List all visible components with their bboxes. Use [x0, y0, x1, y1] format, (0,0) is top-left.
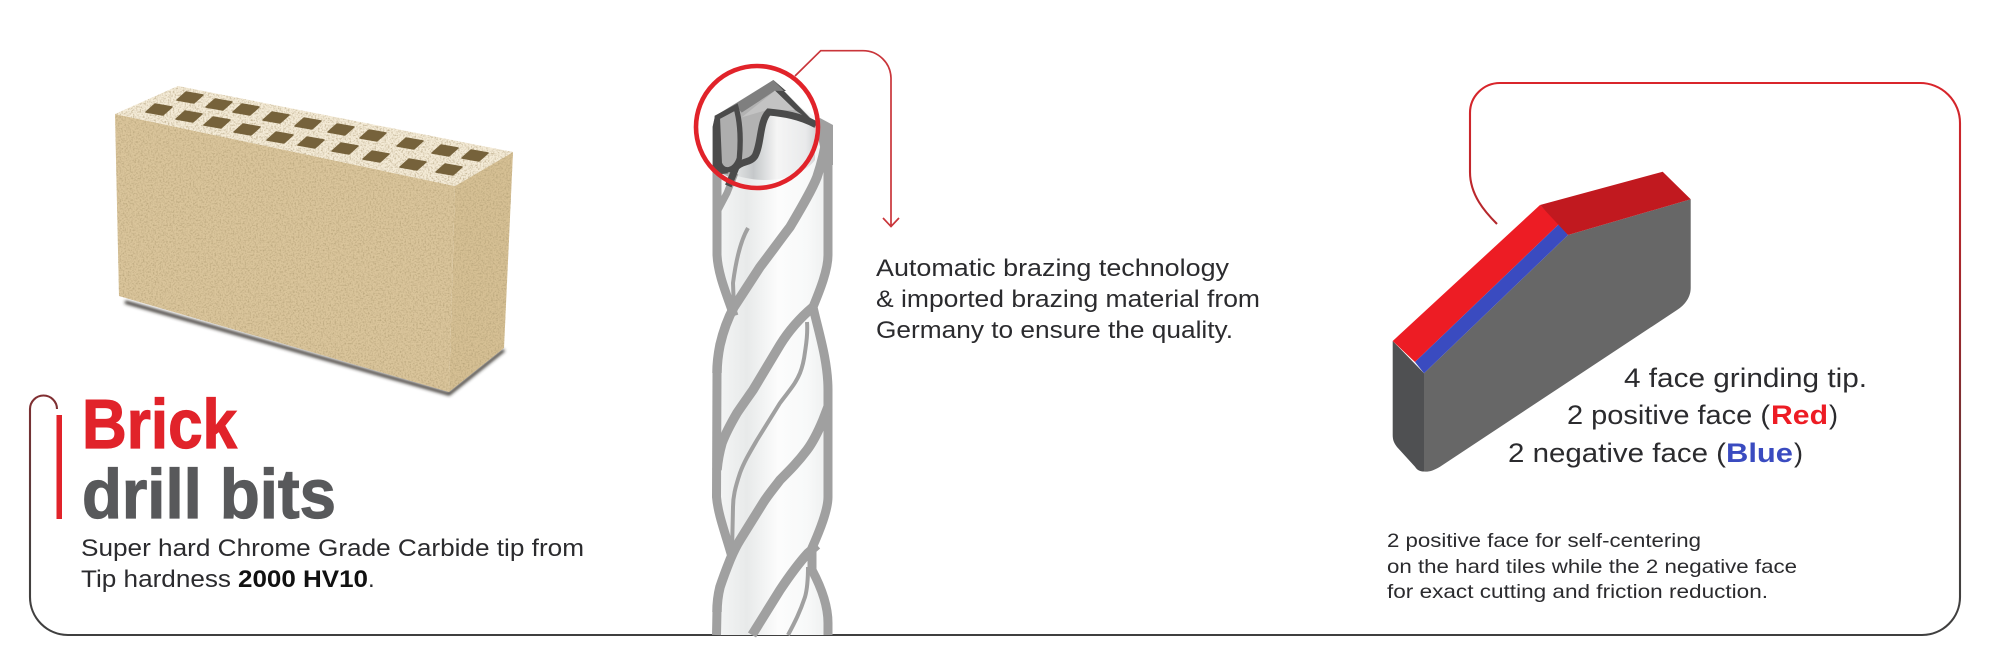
- title: [82, 385, 336, 533]
- red positive face: [1393, 205, 1559, 362]
- text: grinding faces legend: [1508, 363, 1867, 468]
- illustration: drill bit: [713, 80, 833, 635]
- text: positive and negative face explanation: for exact cutting and friction reduction.: [1387, 581, 1768, 603]
- text: carbide tip description: Tip hardness: [81, 566, 231, 593]
- text: grinding faces legend: ): [1794, 438, 1803, 468]
- text: grinding faces legend: 2 negative face (: [1508, 438, 1726, 468]
- text: positive and negative face explanation: on the hard tiles while the 2 negative face: [1387, 556, 1797, 578]
- text: brazing technology: & imported brazing material from: [876, 286, 1260, 313]
- carbide tip: [713, 80, 817, 186]
- main grey face: [1424, 199, 1691, 472]
- upper flute near tip: [717, 173, 735, 212]
- drill outer edges: [716, 125, 828, 635]
- text: brazing technology: Automatic brazing technology: [876, 255, 1229, 282]
- flute bands: [717, 135, 828, 635]
- accent: red vertical bar: [56, 415, 62, 519]
- text: carbide tip description: Super hard Chrome Grade Carbide tip from: [81, 535, 584, 562]
- text: positive and negative face explanation: [1387, 530, 1797, 603]
- title: drill bits: [82, 455, 336, 533]
- text: grinding faces legend: Red: [1771, 400, 1828, 430]
- text: carbide tip description: [81, 535, 584, 593]
- text: grinding faces legend: 4 face grinding tip.: [1624, 363, 1867, 393]
- title: Brick: [82, 385, 237, 463]
- arrow: lead line from circle to text: [795, 51, 899, 227]
- text: carbide tip description: .: [368, 566, 375, 593]
- text: brazing technology: [876, 255, 1260, 344]
- text: grinding faces legend: ): [1829, 400, 1838, 430]
- callout: red circle around tip: [696, 66, 818, 188]
- text: grinding faces legend: 2 positive face (: [1567, 400, 1770, 430]
- text: carbide tip description: 2000 HV10: [238, 566, 368, 593]
- thin flute lines: [732, 228, 808, 635]
- text: brazing technology: Germany to ensure the quality.: [876, 317, 1233, 344]
- shoulder edge: [815, 118, 833, 165]
- blue negative face: [1415, 224, 1568, 373]
- text: grinding faces legend: Blue: [1726, 438, 1793, 468]
- left side face: [1393, 341, 1424, 472]
- drill body fill: [716, 100, 828, 635]
- dark red top face: [1540, 172, 1691, 235]
- panel frame: rounded outline with hook and callout lead: [30, 83, 1960, 635]
- illustration: carbide grinding tip: [1393, 172, 1691, 472]
- drill head shading: [722, 110, 815, 180]
- image: hollow brick: [115, 86, 513, 394]
- text: positive and negative face explanation: 2 positive face for self-centering: [1387, 530, 1701, 552]
